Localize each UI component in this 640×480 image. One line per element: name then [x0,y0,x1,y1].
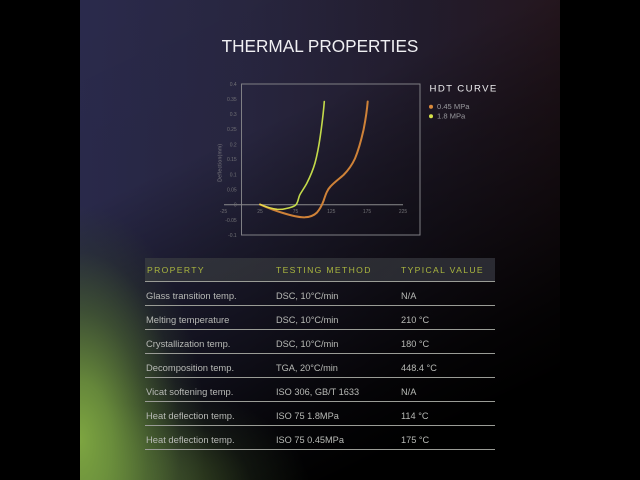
row: crystallization: DSC, 10°C/min [276,339,338,349]
y axis labels: 0.3 [230,112,237,118]
curve: 1.8 MPa [260,102,324,209]
row: glass transition: Glass transition temp. [146,290,237,301]
x axis labels: 125 [327,209,336,215]
row: heat deflection 0.45: 175 °C [401,435,429,445]
chart: HDT curve [218,82,498,239]
y axis labels [225,82,237,239]
row: heat deflection 1.8: ISO 75 1.8MPa [276,411,339,421]
row: crystallization: Crystallization temp. [146,338,230,349]
x axis labels: 25 [257,209,263,215]
row: vicat: N/A [401,387,416,397]
row: heat deflection 1.8: Heat deflection temp. [146,410,235,421]
x axis labels: -25 [220,209,227,215]
y axis labels: 0 [234,202,237,208]
table: thermal properties [145,258,495,281]
row: decomposition: TGA, 20°C/min [276,363,338,373]
y axis title: Deflection(mm) [218,144,224,182]
y axis labels: 0.05 [227,188,237,194]
row: heat deflection 1.8 [146,410,429,421]
curve: 0.45 MPa [260,102,368,217]
row: heat deflection 0.45 [146,434,429,445]
table header: TYPICAL VALUE [401,265,484,275]
row: decomposition: 448.4 °C [401,363,437,373]
y axis labels: -0.05 [225,218,237,224]
y axis labels: 0.25 [227,127,237,133]
y axis labels: 0.15 [227,157,237,163]
row: glass transition: DSC, 10°C/min [276,291,338,301]
row: heat deflection 0.45: ISO 75 0.45MPa [276,435,344,445]
row: vicat: Vicat softening temp. [146,386,233,397]
legend: 1.8 MPa: 1.8 MPa [437,112,466,121]
row: glass transition [146,290,416,301]
y axis labels: 0.2 [230,142,237,148]
row: melting [146,314,429,325]
table header: TESTING METHOD [276,265,372,275]
row: crystallization: 180 °C [401,339,429,349]
row: decomposition: Decomposition temp. [146,362,234,373]
y axis labels: 0.35 [227,97,237,103]
row: melting: DSC, 10°C/min [276,315,338,325]
title: THERMAL PROPERTIES [222,36,418,56]
chart heading: HDT CURVE [430,84,498,94]
x axis labels: 75 [293,209,298,215]
y axis labels: -0.1 [228,233,237,239]
row: glass transition: N/A [401,291,416,301]
y axis labels: 0.4 [230,82,237,88]
legend: 0.45 MPa: 0.45 MPa [437,102,470,111]
row: vicat: ISO 306, GB/T 1633 [276,387,359,397]
row: decomposition [146,362,437,373]
x axis labels: 175 [363,209,371,215]
chart frame [242,84,420,235]
x axis labels: 225 [399,209,407,215]
table header: PROPERTY [147,265,205,275]
x axis labels [220,209,407,215]
table header [145,258,495,281]
row: melting: Melting temperature [146,314,229,325]
panel: background [80,0,560,480]
row: vicat [146,386,416,397]
row: crystallization [146,338,429,349]
row: melting: 210 °C [401,315,429,325]
row: heat deflection 0.45: Heat deflection temp. [146,434,235,445]
x axis [224,204,403,206]
row: heat deflection 1.8: 114 °C [401,411,429,421]
y axis labels: 0.1 [230,172,237,178]
